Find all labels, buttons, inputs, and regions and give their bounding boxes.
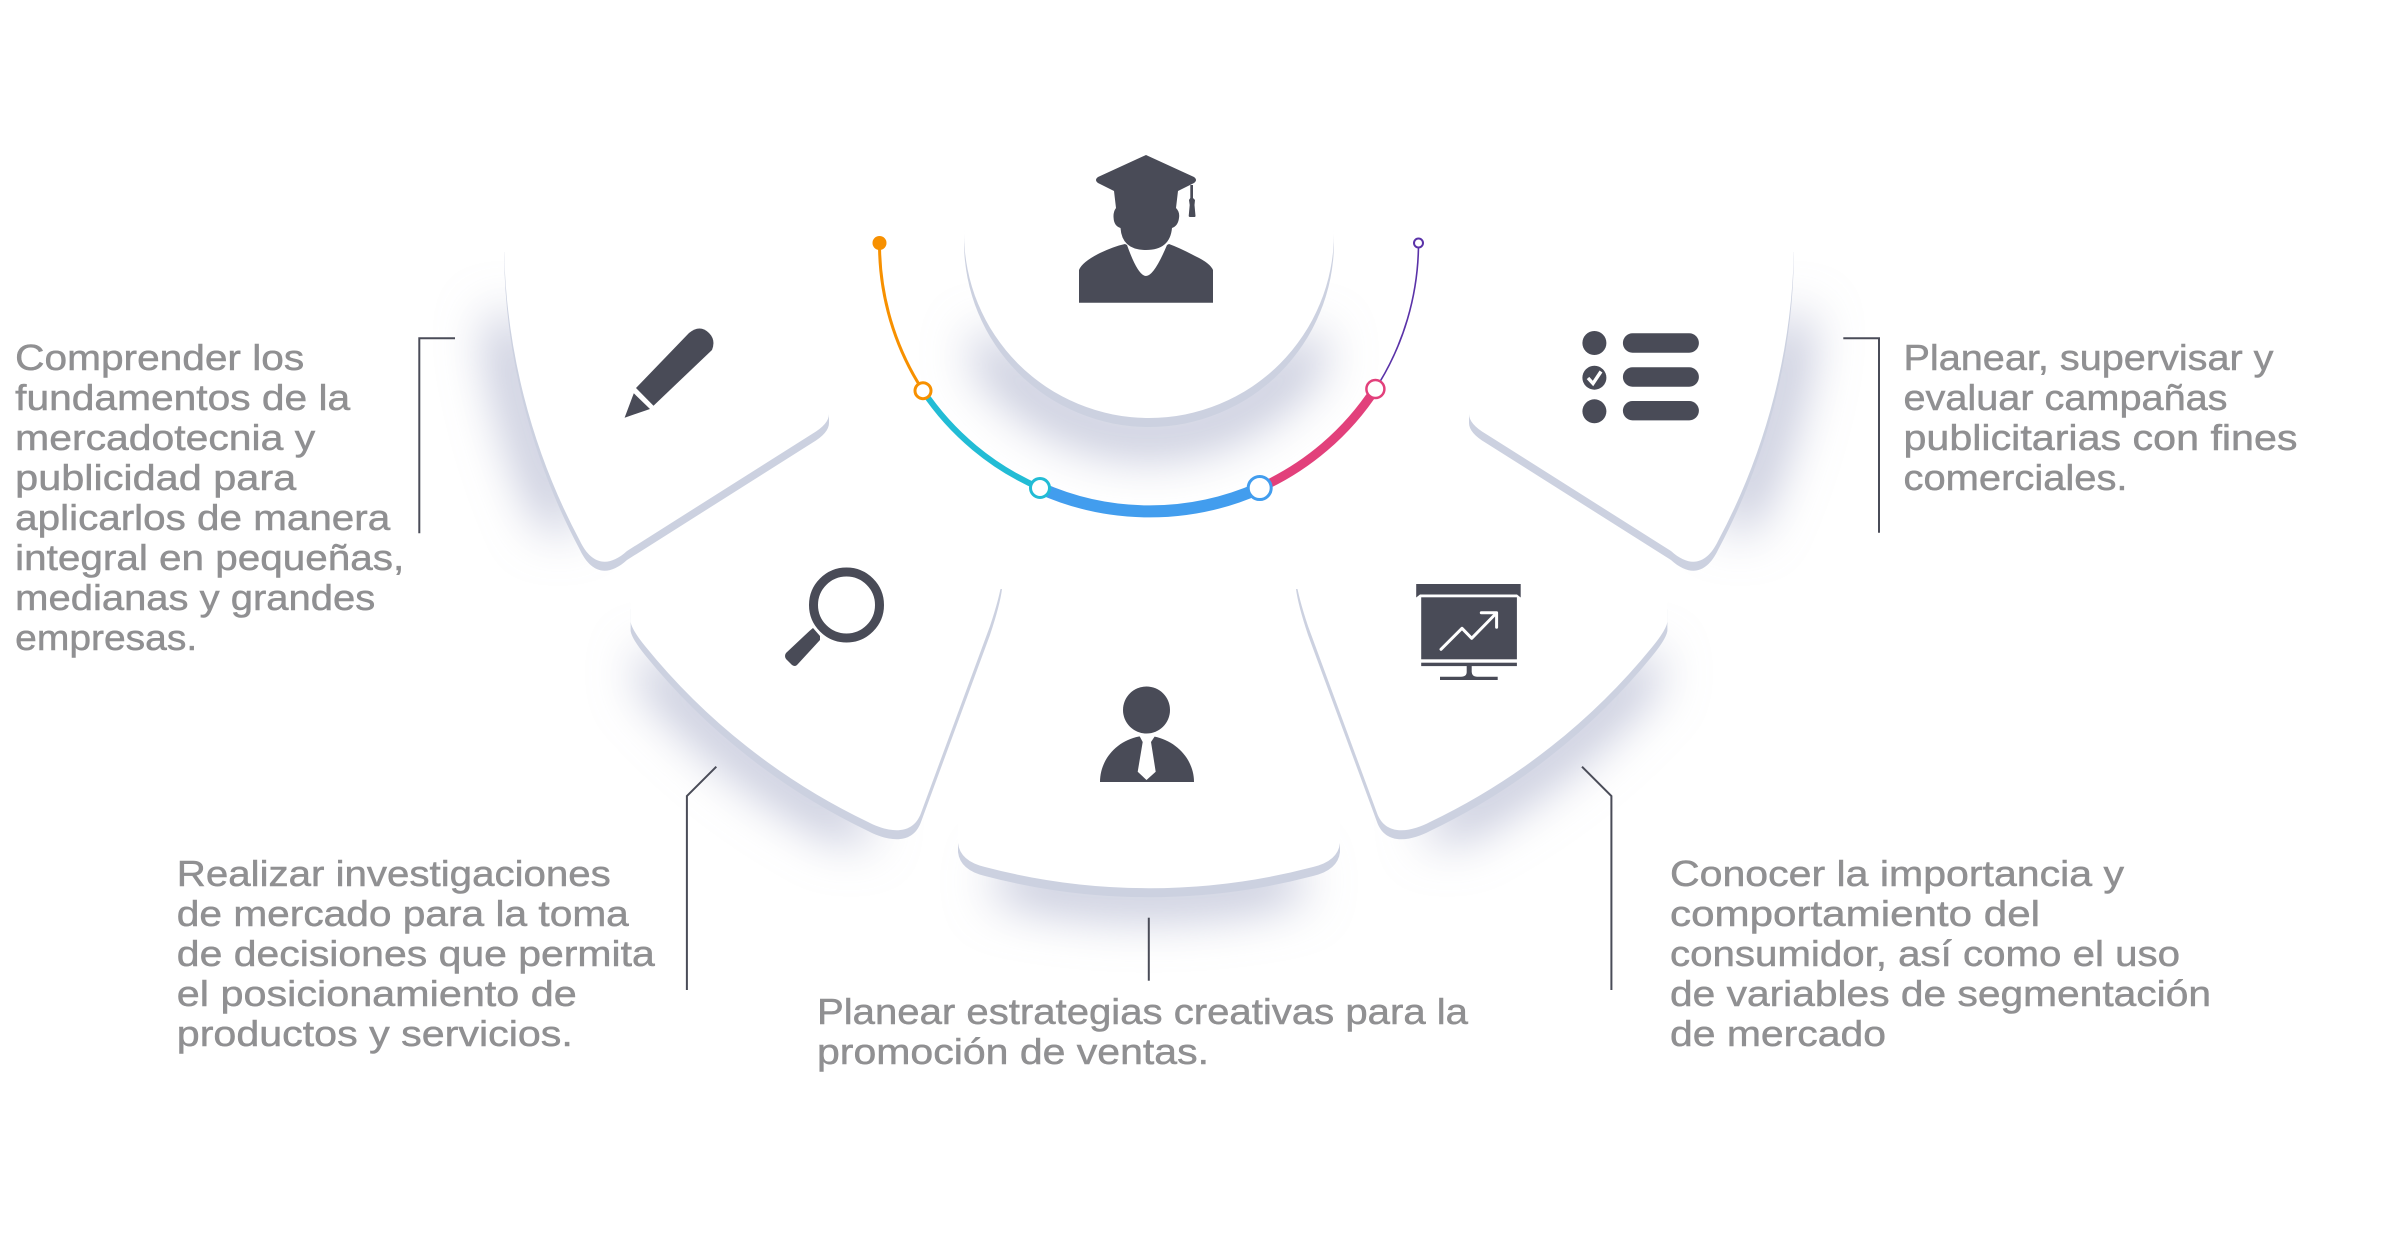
- text block: campañas: Planear, supervisar y: [1904, 337, 2274, 378]
- text block: campañas: [1904, 337, 2298, 498]
- text block: investigaciones: Realizar investigaciones: [177, 853, 611, 894]
- text block: campañas: evaluar campañas: [1904, 377, 2228, 418]
- panel: person petal (bottom centre): [958, 600, 1340, 897]
- icon: person with tie: [1100, 686, 1194, 782]
- text block: investigaciones: de mercado para la toma: [177, 893, 630, 934]
- text block: fundamentos: integral en pequeñas,: [15, 537, 404, 578]
- text block: consumidor: de mercado: [1670, 1013, 1886, 1054]
- text block: investigaciones: de decisiones que permita: [177, 933, 656, 974]
- text block: fundamentos: mercadotecnia y: [15, 417, 315, 458]
- text block: estrategias: Planear estrategias creativas para la: [817, 991, 1469, 1032]
- text block: investigaciones: productos y servicios.: [177, 1013, 573, 1054]
- text block: fundamentos: aplicarlos de manera: [15, 497, 391, 538]
- text block: consumidor: comportamiento del: [1670, 893, 2040, 934]
- icon: graduate with cap: [1079, 155, 1213, 303]
- text block: fundamentos: Comprender los: [15, 337, 304, 378]
- text block: investigaciones: el posicionamiento de: [177, 973, 577, 1014]
- text block: fundamentos: fundamentos de la: [15, 377, 351, 418]
- leader line: top right: [1843, 338, 1879, 533]
- text block: consumidor: consumidor, así como el uso: [1670, 933, 2180, 974]
- text block: fundamentos: empresas.: [15, 617, 197, 658]
- text block: fundamentos: medianas y grandes: [15, 577, 375, 618]
- text block: campañas: publicitarias con fines: [1904, 417, 2298, 458]
- text block: consumidor: [1670, 853, 2211, 1054]
- panel: magnifier petal (lower left): [631, 572, 1002, 839]
- text block: campañas: comerciales.: [1904, 457, 2128, 498]
- text block: investigaciones: [177, 853, 656, 1054]
- icon: presentation screen with rising chart: [1416, 584, 1521, 680]
- icon: checklist: [1582, 331, 1699, 423]
- arc: five coloured segments with markers: [872, 236, 1423, 511]
- panel: checklist petal (top right): [1469, 243, 1794, 571]
- text block: estrategias: promoción de ventas.: [817, 1031, 1209, 1072]
- text block: estrategias: [817, 991, 1469, 1072]
- icon: magnifying glass: [785, 572, 880, 666]
- leader line: lower left: [687, 767, 716, 990]
- leader line: lower right: [1582, 767, 1611, 990]
- leader line: top left: [419, 338, 455, 533]
- leader line: bottom centre: [1148, 918, 1150, 981]
- icon: pencil: [625, 328, 713, 418]
- text block: fundamentos: publicidad para: [15, 457, 297, 498]
- text block: consumidor: de variables de segmentación: [1670, 973, 2211, 1014]
- panel: pencil petal (top left): [504, 243, 829, 571]
- text block: fundamentos: [15, 337, 404, 658]
- text block: consumidor: Conocer la importancia y: [1670, 853, 2124, 894]
- panel: chart petal (lower right): [1296, 580, 1667, 839]
- panel: central graduate semicircle: [964, 48, 1334, 434]
